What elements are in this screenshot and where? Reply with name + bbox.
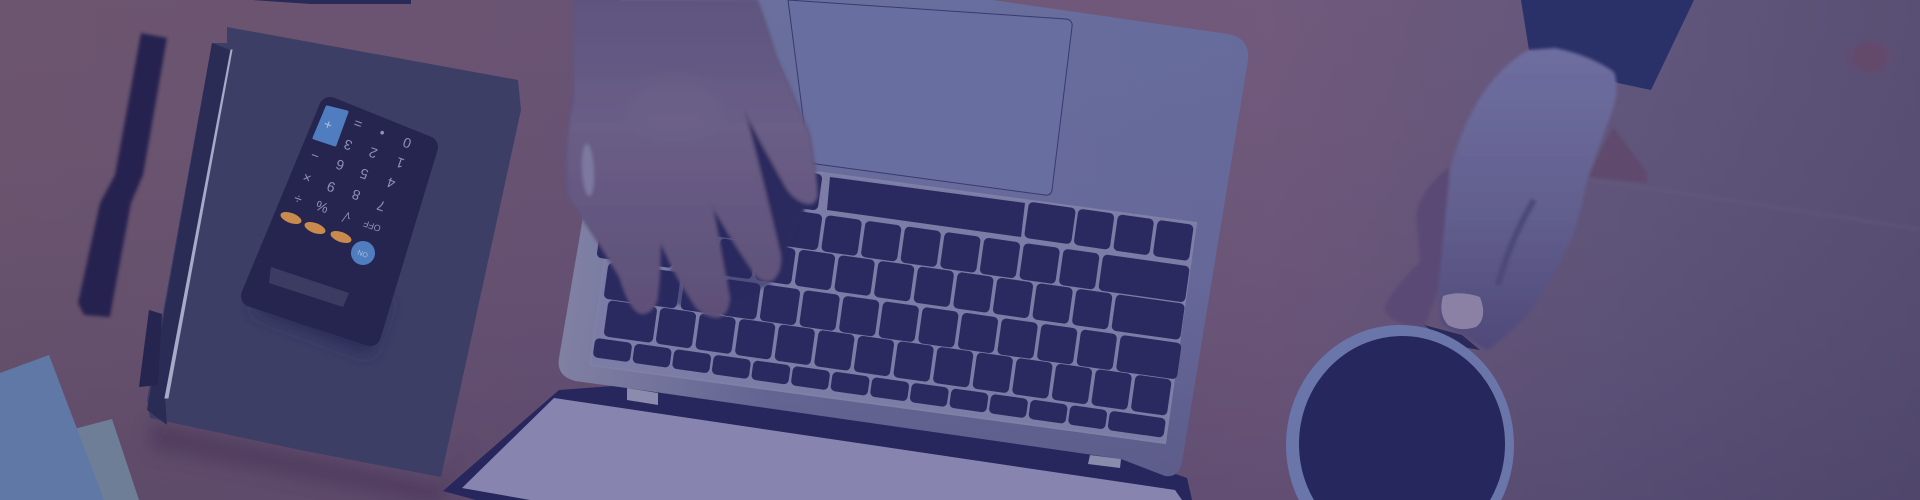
- keyboard top row keys: [624, 148, 822, 210]
- calculator key labels: 8: [349, 186, 362, 204]
- notebook: [139, 27, 521, 477]
- calculator key labels: √: [340, 208, 353, 226]
- knuckle highlight: [630, 82, 720, 138]
- calculator orange keys: [279, 210, 353, 245]
- calculator key labels: 3: [341, 136, 354, 154]
- pinky highlight: [581, 144, 595, 196]
- calculator key labels: 5: [357, 165, 370, 183]
- calculator key labels: 7: [374, 197, 387, 215]
- hinge left: [627, 388, 658, 405]
- calculator key labels: 4: [384, 174, 397, 192]
- calculator key labels: =: [351, 115, 365, 133]
- calculator key labels: [291, 115, 413, 234]
- calculator key labels: %: [313, 197, 331, 217]
- calculator key labels: OFF: [361, 218, 382, 234]
- cup handle: [1424, 325, 1480, 350]
- keyboard fourth row: [604, 301, 1171, 415]
- calculator key labels: 1: [393, 154, 406, 172]
- trackpad: [788, 0, 1072, 195]
- calculator key labels: 6: [333, 156, 346, 174]
- laptop screen: [443, 385, 1192, 500]
- dark shadow beside index finger: [742, 108, 806, 262]
- calculator plus key: +: [321, 116, 335, 134]
- right hand holding cup: [1384, 0, 1694, 350]
- keyboard third row: [604, 263, 1181, 379]
- thumb nail: [1441, 293, 1483, 329]
- keyboard number row: [584, 182, 1189, 302]
- touch bar: [827, 177, 1025, 237]
- back of fingers: [1588, 127, 1647, 183]
- wood knot: [1844, 39, 1896, 75]
- calculator key labels: •: [377, 125, 387, 141]
- calculator key labels: 9: [324, 178, 337, 196]
- wrist and palm: [1438, 48, 1617, 350]
- shadowed fingers: [1384, 167, 1450, 328]
- pen: [78, 33, 167, 317]
- dark object at top edge: [253, 0, 411, 4]
- calculator key labels: 2: [366, 144, 379, 162]
- finger separation: [1498, 200, 1534, 285]
- calculator display: [269, 267, 349, 307]
- calculator: [250, 107, 427, 355]
- shadow wedge under fingers: [660, 105, 800, 310]
- calculator key labels: ×: [300, 169, 314, 187]
- notebook shadow: [150, 420, 470, 500]
- keyboard well: [590, 146, 1196, 443]
- calculator key labels: −: [308, 147, 322, 165]
- papers at bottom left: [0, 355, 139, 500]
- calculator blue round key: [351, 241, 375, 265]
- keyboard second row: [597, 222, 1184, 339]
- calculator key labels: ÷: [291, 190, 304, 208]
- calculator blue round key: ON: [357, 248, 369, 258]
- keyboard function keys: [1025, 202, 1193, 260]
- coffee cup: [1286, 325, 1514, 500]
- keyboard bottom row: [593, 339, 1165, 437]
- hand and fingers: [566, 0, 817, 317]
- sleeve: [1521, 0, 1694, 90]
- calculator key labels: 0: [400, 134, 413, 152]
- typing hand: [566, 0, 817, 317]
- laptop base: [559, 0, 1248, 476]
- hinge right: [1088, 455, 1121, 468]
- calculator plus key: [314, 107, 347, 145]
